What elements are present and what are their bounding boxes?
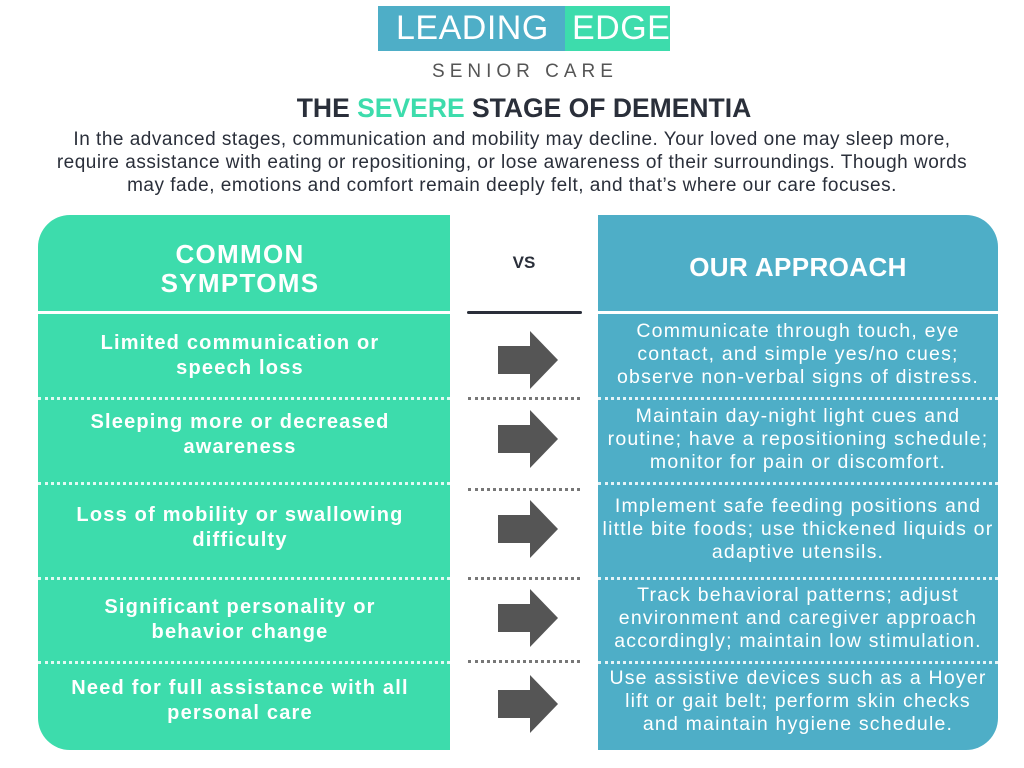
arrow 1 [498,331,558,389]
approach 4: Track behavioral patterns; adjust [637,584,959,606]
symptom 2: awareness [183,436,297,458]
approach 2 [608,405,988,473]
intro text [57,129,967,196]
symptom 4: Significant personality or [104,596,376,618]
symptom 1 [101,332,379,379]
approach 2: routine; have a repositioning schedule; [608,428,988,450]
header: common symptoms [161,239,319,298]
intro text: In the advanced stages, communication and mobility may decline. Your loved one may sleep more, [73,129,951,150]
approach 3: Implement safe feeding positions and [615,495,981,517]
approach 5: lift or gait belt; perform skin checks [625,690,971,712]
symptom 3 [76,504,404,551]
logo: EDGE [572,9,670,47]
approach 5: and maintain hygiene schedule. [643,713,953,735]
approach 4: accordingly; maintain low stimulation. [614,630,982,652]
symptom 4: behavior change [152,621,328,643]
symptom 5: personal care [167,702,313,724]
intro text: may fade, emotions and comfort remain deeply felt, and that’s where our care focuses. [127,175,897,196]
symptom 1: speech loss [176,357,304,379]
approach 1: contact, and simple yes/no cues; [637,343,959,365]
symptom 4 [104,596,376,643]
arrow 5 [498,675,558,733]
approach 3 [603,495,993,563]
symptom 2 [90,411,390,458]
symptom 5 [71,677,409,724]
symptom 2: Sleeping more or decreased [90,411,390,433]
panel: common symptoms [38,215,450,750]
approach 5: Use assistive devices such as a Hoyer [609,667,987,689]
intro text: require assistance with eating or repositioning, or lose awareness of their surroundings. Though words [57,152,967,173]
approach 4: environment and caregiver approach [619,607,977,629]
header: our approach: OUR APPROACH [689,252,907,282]
center column [450,200,598,768]
approach 3: little bite foods; use thickened liquids or [603,518,993,540]
approach 5 [609,667,987,735]
panel: our approach [598,215,998,750]
approach 2: Maintain day-night light cues and [636,405,960,427]
approach 3: adaptive utensils. [712,541,884,563]
symptom 5: Need for full assistance with all [71,677,409,699]
title: THE SEVERE STAGE OF DEMENTIA [297,93,751,123]
vs label: VS [513,253,535,272]
arrow 4 [498,589,558,647]
approach 1: observe non-verbal signs of distress. [617,366,979,388]
logo [378,6,670,82]
symptom 1: Limited communication or [101,332,379,354]
approach 1: Communicate through touch, eye [636,320,960,342]
symptom 3: difficulty [192,529,288,551]
approach 1 [617,320,979,388]
approach 4 [614,584,982,652]
header: common symptoms: COMMON [175,239,305,269]
arrow 2 [498,410,558,468]
header: common symptoms: SYMPTOMS [161,268,319,298]
arrow 3 [498,500,558,558]
symptom 3: Loss of mobility or swallowing [76,504,404,526]
approach 2: monitor for pain or discomfort. [650,451,946,473]
logo: SENIOR CARE [432,61,618,82]
logo: LEADING [396,9,549,47]
